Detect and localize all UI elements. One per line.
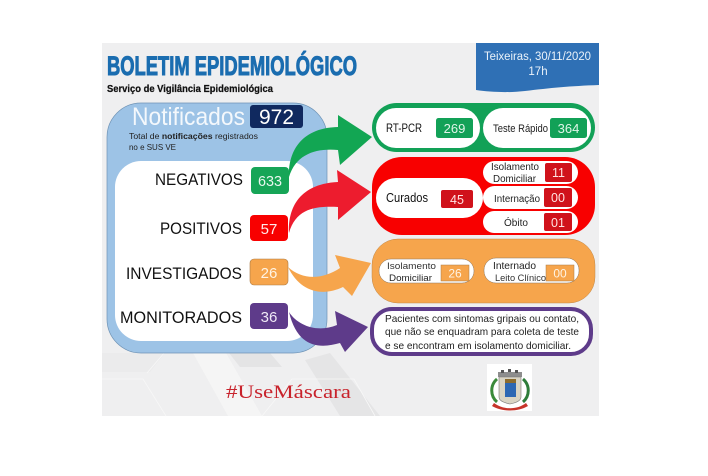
panel: monitorados: e se encontram em isolamento domiciliar. bbox=[385, 340, 571, 352]
internado leito clinico: 00 bbox=[553, 266, 567, 280]
panel: monitorados bbox=[372, 309, 591, 354]
date tag: Teixeiras, 30/11/2020 bbox=[484, 51, 591, 63]
isolamento domiciliar bbox=[379, 259, 474, 284]
isolamento domiciliar: 26 bbox=[448, 266, 462, 280]
panel: investigados bbox=[372, 239, 595, 303]
arrow: red bbox=[289, 170, 371, 233]
panel: curados bbox=[372, 157, 595, 235]
row: positivos bbox=[160, 215, 288, 241]
row: monitorados: 36 bbox=[261, 309, 277, 326]
title: BOLETIM EPIDEMIOLÓGICO bbox=[107, 50, 357, 81]
row: monitorados: MONITORADOS bbox=[120, 308, 242, 327]
internacao pill: 00 bbox=[551, 191, 565, 205]
subtitle: Serviço de Vigilância Epidemiológica bbox=[107, 83, 273, 95]
teste rapido: 364 bbox=[558, 121, 579, 136]
description bbox=[129, 131, 258, 152]
internacao pill: Internação bbox=[494, 194, 540, 205]
heading: notificados: Notificados bbox=[132, 103, 245, 131]
date tag bbox=[476, 43, 599, 92]
hashtag: #UseMáscara bbox=[226, 382, 352, 403]
teste rapido bbox=[483, 108, 591, 148]
internado leito clinico bbox=[484, 258, 579, 284]
isolamento domiciliar pill: Domiciliar bbox=[493, 174, 537, 185]
isolamento domiciliar pill bbox=[483, 161, 578, 185]
row: negativos bbox=[155, 167, 289, 194]
row: negativos: NEGATIVOS bbox=[155, 170, 243, 189]
panel: monitorados: Pacientes com sintomas gripais ou contato, bbox=[385, 313, 579, 325]
isolamento domiciliar pill: Isolamento bbox=[491, 162, 539, 173]
date tag: 17h bbox=[528, 66, 548, 78]
isolamento domiciliar pill: 11 bbox=[552, 166, 565, 180]
isolamento domiciliar: Isolamento bbox=[387, 261, 436, 272]
description: no e SUS VE bbox=[129, 142, 176, 152]
icon: municipal coat of arms bbox=[487, 364, 532, 411]
row: negativos: 633 bbox=[258, 173, 282, 190]
rt-pcr bbox=[376, 108, 480, 148]
row: positivos: 57 bbox=[261, 221, 277, 238]
curados pill: Curados bbox=[386, 191, 428, 205]
arrow: green bbox=[289, 115, 372, 177]
panel: notificados bbox=[107, 103, 327, 353]
total notificados badge: 972 bbox=[259, 106, 294, 129]
rt-pcr: 269 bbox=[444, 121, 465, 136]
row: positivos: POSITIVOS bbox=[160, 219, 242, 238]
inner white panel bbox=[115, 161, 313, 341]
background panel bbox=[102, 43, 599, 416]
obito pill: Óbito bbox=[504, 216, 528, 229]
arrow: orange bbox=[288, 255, 371, 296]
internado leito clinico: Internado bbox=[493, 260, 536, 272]
row: investigados: 26 bbox=[261, 265, 277, 282]
obito pill bbox=[483, 211, 578, 233]
description: Total de notificações registrados bbox=[129, 131, 258, 141]
curados pill bbox=[376, 178, 483, 218]
total notificados badge bbox=[250, 105, 303, 129]
panel: testes bbox=[372, 103, 595, 152]
isolamento domiciliar: Domiciliar bbox=[389, 273, 432, 284]
obito pill: 01 bbox=[551, 216, 565, 230]
panel: monitorados: que não se enquadram para coleta de teste bbox=[385, 326, 579, 338]
row: investigados bbox=[126, 259, 288, 285]
row: monitorados bbox=[120, 303, 288, 329]
rt-pcr: RT-PCR bbox=[386, 123, 422, 135]
teste rapido: Teste Rápido bbox=[493, 123, 548, 135]
row: investigados: INVESTIGADOS bbox=[126, 264, 242, 283]
arrow: purple bbox=[289, 311, 368, 352]
curados pill: 45 bbox=[450, 193, 464, 207]
internacao pill bbox=[483, 186, 578, 209]
internado leito clinico: Leito Clínico bbox=[495, 273, 546, 284]
